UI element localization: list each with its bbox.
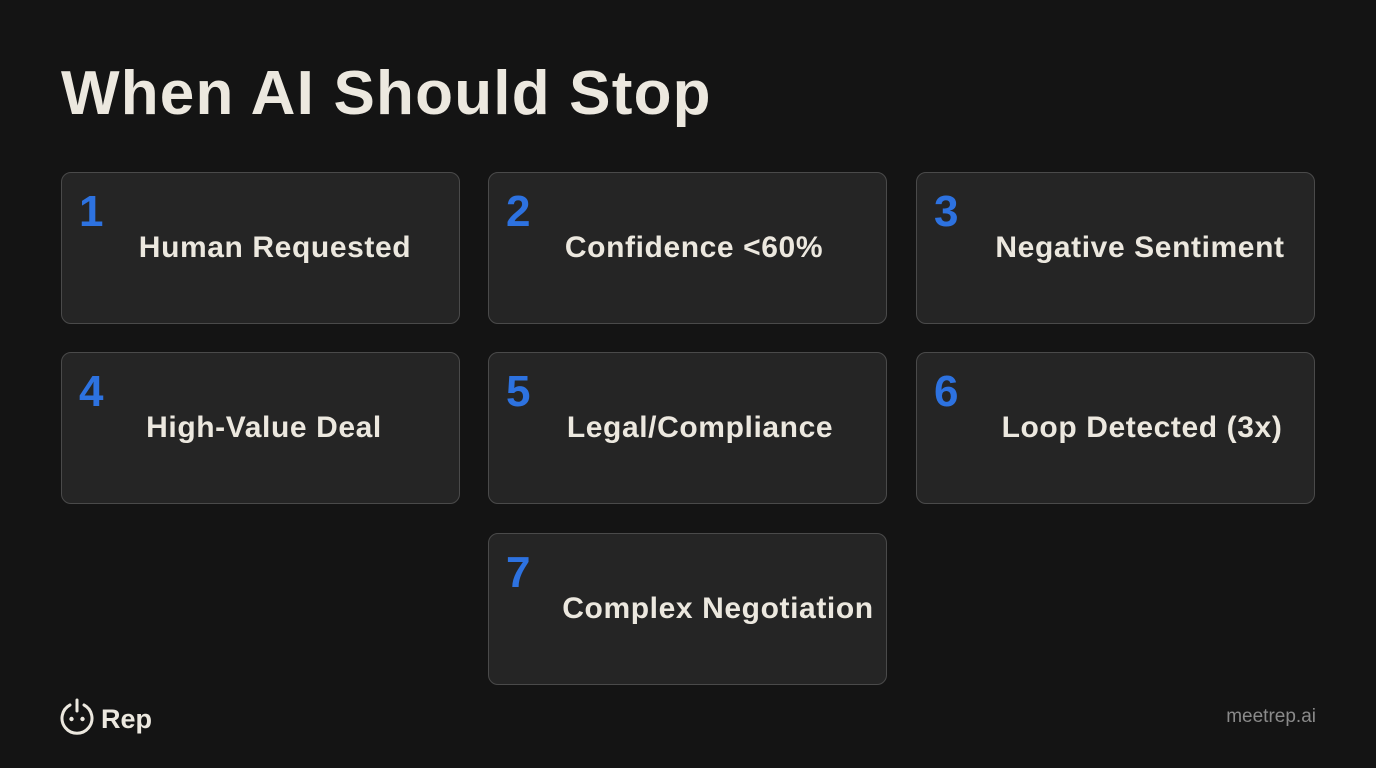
card 2 xyxy=(488,172,887,324)
card 4: 4 xyxy=(79,367,103,416)
card 6: Loop Detected (3x) xyxy=(1002,411,1282,444)
card 6 xyxy=(916,352,1315,504)
card 1: Human Requested xyxy=(139,231,411,264)
card 5: 5 xyxy=(506,367,530,416)
card 1: 1 xyxy=(79,187,103,236)
card 5 xyxy=(488,352,887,504)
logo xyxy=(60,698,152,735)
title: When AI Should Stop xyxy=(61,59,712,128)
card 2: 2 xyxy=(506,187,530,236)
card 2: Confidence <60% xyxy=(565,231,823,264)
card 7 xyxy=(488,533,887,685)
logo: Rep xyxy=(101,704,152,734)
card 6: 6 xyxy=(934,367,958,416)
card 3 xyxy=(916,172,1315,324)
card 7: Complex Negotiation xyxy=(562,592,874,625)
card 1 xyxy=(61,172,460,324)
card 5: Legal/Compliance xyxy=(567,411,833,444)
card 4 xyxy=(61,352,460,504)
card 7: 7 xyxy=(506,548,530,597)
card 3: 3 xyxy=(934,187,958,236)
card 4: High-Value Deal xyxy=(146,411,382,444)
url: meetrep.ai xyxy=(1226,706,1316,727)
card 3: Negative Sentiment xyxy=(995,231,1285,264)
